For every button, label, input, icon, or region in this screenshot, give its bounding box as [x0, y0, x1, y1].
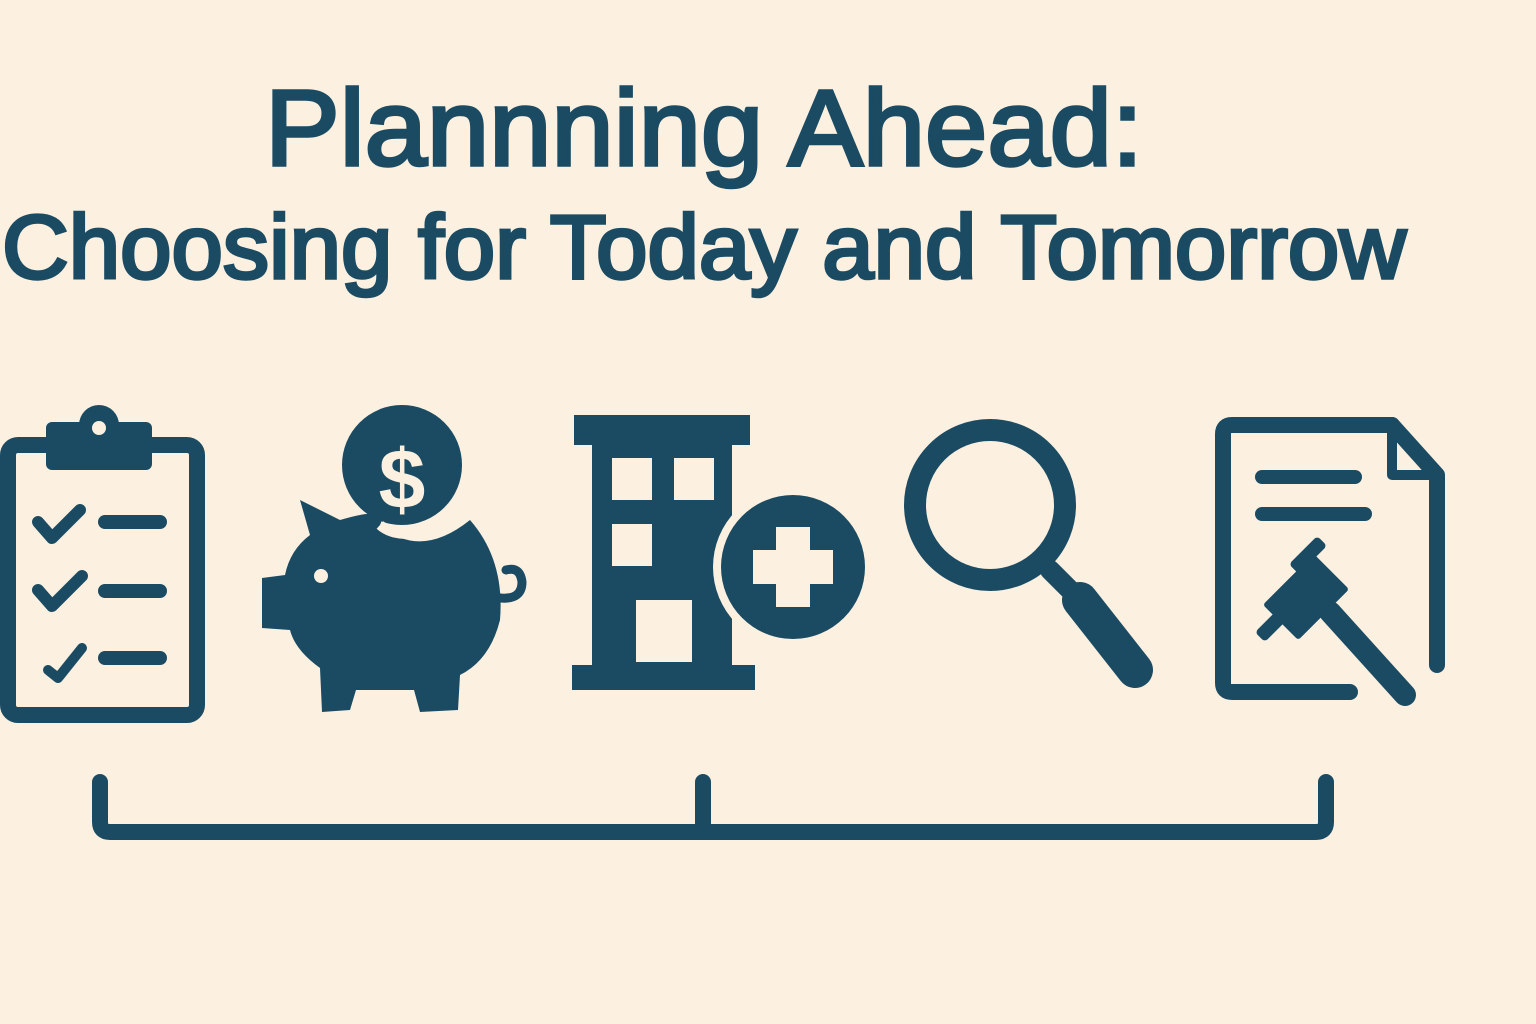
- title: Plannning Ahead:: [265, 67, 1143, 188]
- icon: magnifying glass: [915, 430, 1135, 670]
- icon: clipboard checklist: [8, 405, 197, 715]
- title: Choosing for Today and Tomorrow: [2, 198, 1407, 298]
- title: [2, 67, 1407, 298]
- icon: legal document with gavel: [1223, 425, 1437, 695]
- icon: piggy bank with coin: $: [379, 432, 425, 526]
- icon: hospital building: [572, 415, 873, 690]
- bracket connector: [100, 782, 1326, 832]
- icon: piggy bank with coin: [262, 405, 522, 712]
